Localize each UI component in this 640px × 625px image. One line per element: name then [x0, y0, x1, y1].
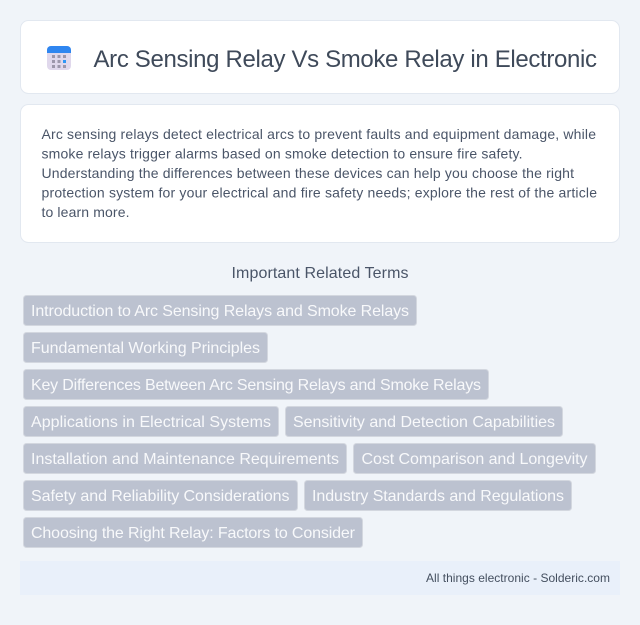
panel: introduction: [20, 104, 620, 242]
text block: introduction paragraph: [42, 126, 597, 220]
text block: introduction paragraph: Arc sensing relays detect electrical arcs to prevent faults and equipment damage, while: [42, 126, 596, 142]
tag: sensitivity: Sensitivity and Detection Capabilities: [293, 414, 555, 431]
tag: key differences: [24, 370, 488, 400]
text block: introduction paragraph: Understanding the differences between these devices can help you choose the right: [42, 165, 574, 181]
tag: sensitivity: [286, 406, 562, 436]
tag: safety: Safety and Reliability Considerations: [31, 488, 290, 505]
tag: choosing: [24, 518, 362, 548]
text block: introduction paragraph: smoke relays trigger alarms based on smoke detection to ensure fire safety.: [42, 146, 522, 162]
tag: installation: Installation and Maintenance Requirements: [31, 451, 339, 468]
tag: choosing: Choosing the Right Relay: Factors to Consider: [31, 525, 356, 542]
tag: introduction: [24, 296, 416, 326]
title: Arc Sensing Relay Vs Smoke Relay in Electronic: [94, 46, 597, 73]
tag: standards: Industry Standards and Regulations: [312, 488, 564, 505]
tag: cost: Cost Comparison and Longevity: [362, 451, 588, 468]
tag: safety: [24, 480, 298, 510]
footer: [20, 561, 620, 595]
tag: standards: [304, 480, 572, 510]
panel: title header: [20, 20, 620, 94]
heading: important related terms: Important Related Terms: [232, 265, 408, 282]
tag: cost: [354, 444, 596, 474]
tag: introduction: Introduction to Arc Sensing Relays and Smoke Relays: [31, 303, 409, 320]
text block: introduction paragraph: to learn more.: [42, 204, 130, 220]
tag: working principles: Fundamental Working Principles: [31, 340, 260, 357]
footer: All things electronic - Solderic.com: [426, 571, 610, 585]
tag: working principles: [24, 332, 268, 362]
tag: key differences: Key Differences Between Arc Sensing Relays and Smoke Relays: [31, 377, 481, 394]
icon: calendar grid: [47, 46, 71, 70]
text block: introduction paragraph: protection system for your electrical and fire safety needs; explore the rest of the article: [42, 185, 597, 201]
tag: installation: [24, 444, 346, 474]
tag: applications: [24, 406, 278, 436]
tag: applications: Applications in Electrical Systems: [31, 414, 271, 431]
